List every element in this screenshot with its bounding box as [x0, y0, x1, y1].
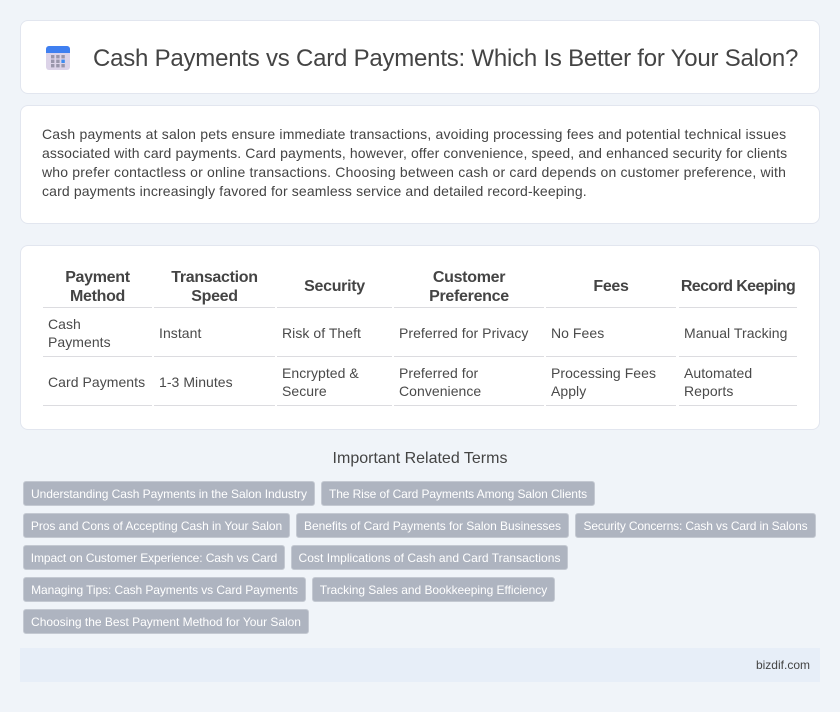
row: card payments: Secure	[282, 383, 327, 399]
text block: description: Cash payments at salon pets ensure immediate transactions, avoiding processing fees and potential technical issues	[42, 126, 786, 142]
related terms tags: Managing Tips: Cash Payments vs Card Payments	[31, 583, 298, 597]
related terms tags: Understanding Cash Payments in the Salon Industry	[31, 487, 307, 501]
related terms tags: Cost Implications of Cash and Card Transactions	[298, 551, 560, 565]
row: card payments: Card Payments	[48, 374, 145, 390]
related terms tags: Pros and Cons of Accepting Cash in Your Salon	[31, 519, 282, 533]
related terms tags: Tracking Sales and Bookkeeping Efficiency	[320, 583, 547, 597]
row: card payments: Preferred for	[399, 365, 478, 381]
footer source: bizdif.com	[756, 658, 810, 672]
row: cash payments	[48, 316, 787, 350]
text block: description: who prefer contactless or online transactions. Choosing between cash or card depends on customer preference, with	[42, 164, 786, 180]
heading: related terms: Important Related Terms	[333, 450, 507, 467]
row: card payments: Encrypted &	[282, 365, 359, 381]
row: card payments: Convenience	[399, 383, 481, 399]
panel: comparison table	[20, 245, 820, 430]
row: card payments: Processing Fees	[551, 365, 656, 381]
row: card payments: Reports	[684, 383, 733, 399]
table header	[65, 269, 795, 305]
table header: Payment	[65, 269, 130, 286]
table header: Speed	[191, 288, 238, 305]
row: cash payments: Manual Tracking	[684, 325, 787, 341]
comparison table	[43, 269, 797, 406]
text block: description: card payments increasingly favored for seamless service and detailed record-keeping.	[42, 183, 587, 199]
related terms tags: The Rise of Card Payments Among Salon Clients	[329, 487, 587, 501]
table header: Record Keeping	[681, 278, 795, 295]
row: cash payments: Payments	[48, 334, 111, 350]
row: card payments: Automated	[684, 365, 752, 381]
title: Cash Payments vs Card Payments: Which Is Better for Your Salon?	[93, 45, 798, 72]
table header: Transaction	[171, 269, 258, 286]
panel: header	[20, 20, 820, 94]
row: card payments: 1-3 Minutes	[159, 374, 233, 390]
related terms tags: Choosing the Best Payment Method for Your Salon	[31, 615, 301, 629]
text block: description	[42, 126, 787, 199]
row: card payments: Apply	[551, 383, 586, 399]
row: cash payments: Risk of Theft	[282, 325, 361, 341]
related terms tags	[23, 481, 816, 634]
table header: Preference	[429, 288, 509, 305]
icon: calendar	[46, 46, 70, 70]
row: cash payments: Instant	[159, 325, 201, 341]
table header: Customer	[433, 269, 505, 286]
related terms tags: Benefits of Card Payments for Salon Businesses	[304, 519, 561, 533]
row: cash payments: Preferred for Privacy	[399, 325, 528, 341]
related terms tags: Security Concerns: Cash vs Card in Salons	[584, 519, 807, 533]
row: cash payments: Cash	[48, 316, 81, 332]
table header: Fees	[593, 278, 629, 295]
footer	[20, 648, 820, 682]
related terms tags: Impact on Customer Experience: Cash vs Card	[31, 551, 277, 565]
row: card payments	[48, 365, 752, 399]
text block: description: associated with card payments. Card payments, however, offer convenience, speed, and enhanced security for clients	[42, 145, 787, 161]
table header: Security	[304, 278, 365, 295]
table header: Method	[70, 288, 125, 305]
row: cash payments: No Fees	[551, 325, 604, 341]
panel: description	[20, 105, 820, 224]
